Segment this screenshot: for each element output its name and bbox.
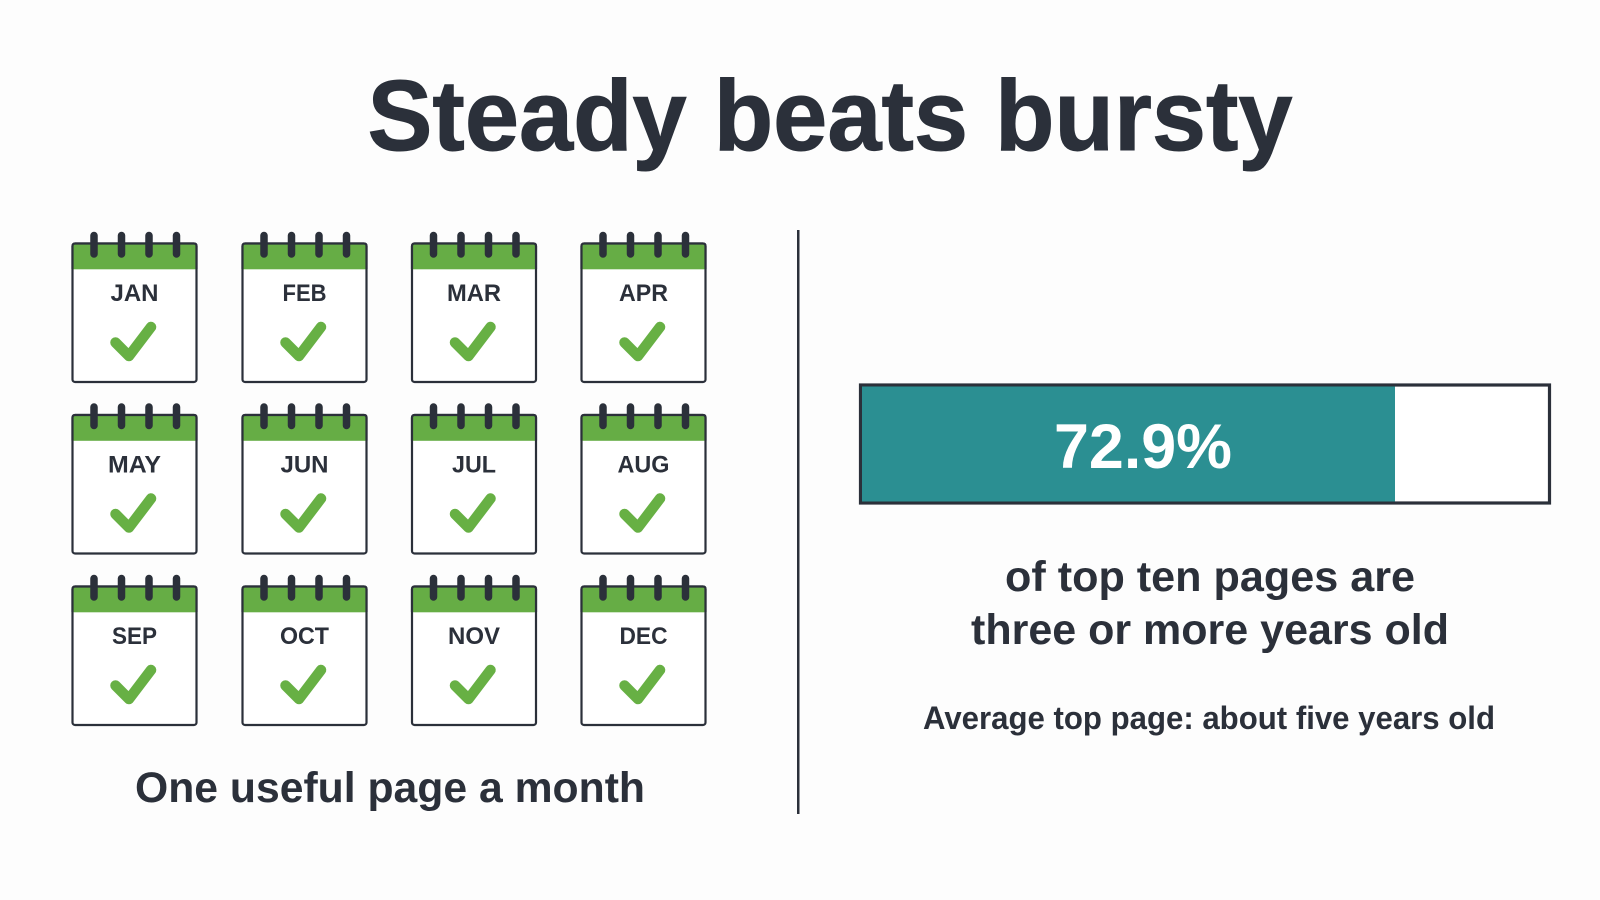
calendar: December: DEC [620, 623, 668, 650]
calendar: April [582, 236, 706, 382]
calendar: May [72, 407, 196, 554]
left caption: One useful page a month [135, 764, 645, 812]
calendar: July: JUL [452, 452, 496, 478]
title: Steady beats bursty [368, 60, 1293, 172]
main statistic description [971, 553, 1449, 654]
calendar: January [72, 236, 196, 382]
calendar: October [242, 578, 366, 725]
bar fill [862, 386, 1395, 502]
calendar grid [72, 236, 706, 725]
calendar: November: NOV [448, 623, 500, 650]
bar value: 72.9% [1054, 412, 1232, 482]
calendar: July [412, 407, 536, 554]
calendar: April: APR [619, 280, 668, 307]
calendar: November [412, 578, 536, 725]
calendar: June: JUN [280, 452, 328, 478]
calendar: January: JAN [110, 280, 158, 307]
calendar: September: SEP [112, 623, 157, 650]
calendar: May: MAY [108, 452, 161, 478]
main statistic description: of top ten pages are [1005, 553, 1415, 601]
calendar: October: OCT [280, 623, 329, 650]
calendar: September [72, 578, 196, 725]
calendar: December [582, 578, 706, 725]
calendar: August [582, 407, 706, 554]
progress bar [860, 385, 1550, 503]
calendar: August: AUG [618, 452, 670, 478]
calendar: June [242, 407, 366, 554]
calendar: March [412, 236, 536, 382]
calendar: February [242, 236, 366, 382]
calendar: February: FEB [282, 280, 326, 307]
main statistic description: three or more years old [971, 606, 1449, 654]
supporting note: Average top page: about five years old [923, 700, 1495, 736]
vertical divider [797, 230, 800, 814]
calendar: March: MAR [447, 280, 501, 307]
